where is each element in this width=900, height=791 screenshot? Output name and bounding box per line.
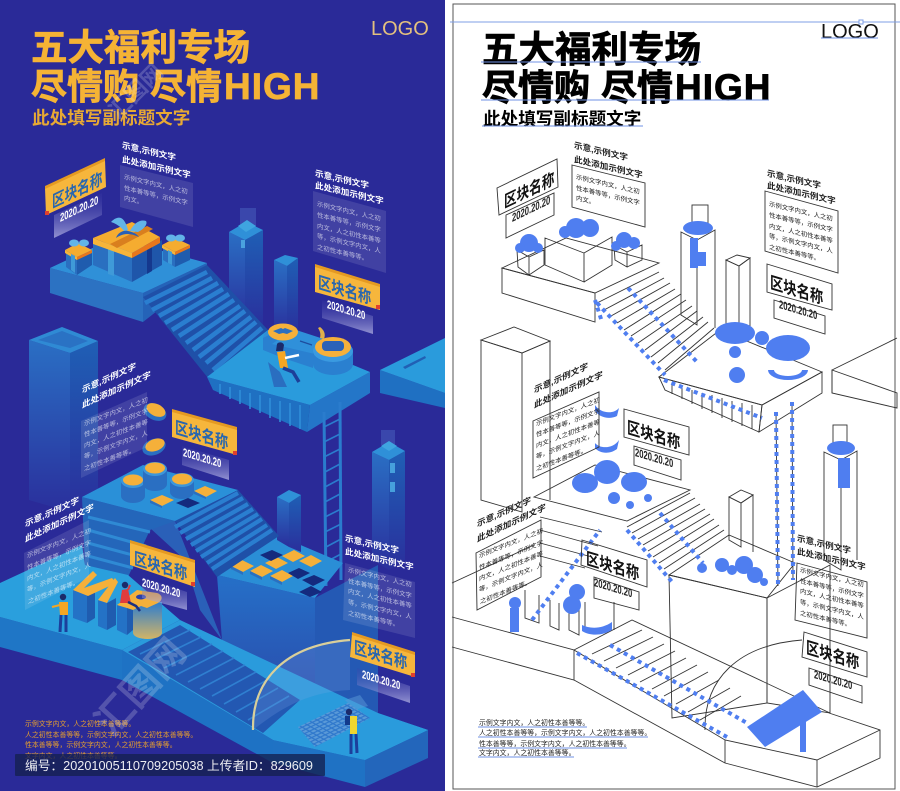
person: sitting woman: [120, 582, 140, 611]
text block A: 内文。: [124, 193, 143, 206]
footer text: 人之初性本善等等，示例文字内文，人之初性本善等等。: [25, 730, 197, 739]
text block C: 示例文字内文，人之初: [84, 395, 148, 428]
wireframe title: 此处填写副标题文字: [483, 109, 641, 129]
wire: text blocks: 等，示例文字内文，人: [769, 231, 833, 255]
wire: banners: [497, 159, 867, 703]
icon: coins: [121, 400, 217, 508]
wire: text blocks: 此处添加示例文字: [767, 179, 836, 206]
wire: text blocks: 示例文字内文，人之初: [576, 172, 640, 196]
wire: banners: 区块名称: [770, 273, 823, 308]
banner 3: 2020.20.20: [183, 447, 222, 471]
text block E: 内文，人之初性本善等: [348, 586, 412, 610]
watermark bar: 编号：20201005110709205038 上传者ID：829609: [25, 759, 313, 773]
wire: text blocks: 示例文字内文，人之初: [800, 565, 864, 589]
platform: coin platform top: [82, 465, 238, 521]
text block B: 等，示例文字内文，人: [317, 231, 381, 255]
building: top centre tower: [229, 208, 263, 328]
platform: gift base: [50, 238, 207, 322]
icon: VIP letters: [73, 571, 162, 639]
text block D: 等，示例文字内文，人: [27, 560, 91, 594]
wire: text blocks: 示例文字内文，人之初: [479, 526, 543, 560]
text block D: 示意,示例文字: [25, 494, 79, 529]
text block A: 示例文字内文，人之初: [124, 172, 188, 196]
stairs: upper staircase: [143, 265, 268, 378]
text block C: 此处添加示例文字: [82, 368, 151, 410]
wire: banners: 2020.20.20: [594, 577, 633, 601]
banner 1: 区块名称: [52, 168, 103, 212]
wire: text blocks: [476, 139, 867, 638]
wire: footer text: 示例文字内文，人之初性本善等等。: [479, 718, 589, 727]
text block B: 此处添加示例文字: [315, 179, 384, 206]
building: lower right tower: [372, 430, 405, 570]
text block D: [24, 494, 94, 610]
wireframe illustration: [452, 139, 897, 787]
text block B: 示例文字内文，人之初: [317, 199, 381, 223]
wire: platforms: [452, 238, 897, 787]
text block A: 性本善等等，示例文字: [124, 183, 188, 207]
wire: text blocks: 此处添加示例文字: [574, 153, 643, 180]
text block B: 示意,示例文字: [315, 167, 369, 191]
icon: keyboard: [298, 695, 370, 747]
footer text: [25, 719, 197, 760]
platform: tile platform: [217, 535, 378, 713]
banner 5: 区块名称: [354, 638, 407, 673]
wire: footer text: 性本善等等，示例文字内文，人之初性本善等等。: [479, 739, 631, 748]
wireframe title: HIGH: [675, 67, 772, 108]
person: figure at keyboard: [345, 709, 357, 754]
wire: text blocks: 性本善等等，示例文字: [536, 406, 600, 439]
icon: large gift box: [93, 218, 162, 282]
person: standing man: [52, 594, 68, 632]
icon: tiles: [231, 550, 325, 597]
wire: text blocks: 之初性本善等等。: [769, 242, 820, 263]
wire: text blocks: 之初性本善等等。: [800, 608, 851, 629]
wire: text blocks: 性本善等等，示例文字: [769, 210, 833, 234]
wire: text blocks: 之初性本善等等。: [480, 577, 531, 606]
wireframe title: 尽情购: [482, 67, 590, 108]
banner 2: 区块名称: [318, 273, 371, 308]
wire: banners: 2020.20.20: [512, 194, 551, 225]
text block E: 等，示例文字内文，人: [348, 597, 412, 621]
wire: staircase lines: [517, 237, 793, 720]
wireframe title: LOGO: [821, 21, 879, 43]
text block E: 示例文字内文，人之初: [348, 565, 412, 589]
text block B: 性本善等等，示例文字: [317, 210, 381, 234]
subtitle: 此处填写副标题文字: [32, 108, 190, 128]
text block E: [343, 532, 415, 638]
wire: text blocks: 示意,示例文字: [767, 167, 821, 191]
wire: text blocks: 此处添加示例文字: [477, 501, 546, 544]
text block E: 此处添加示例文字: [345, 545, 414, 572]
title: 尽情: [150, 66, 222, 107]
wire: text blocks: 此处添加示例文字: [797, 545, 866, 572]
stairs: coin platform left staircase: [82, 497, 175, 577]
wire: text blocks: 等，示例文字内文，人: [800, 597, 864, 621]
text block C: [81, 360, 151, 478]
stairs: coin platform right staircase: [150, 490, 279, 640]
wire: text blocks: 示例文字内文，人之初: [536, 395, 600, 428]
wire: banners: 区块名称: [586, 549, 639, 584]
footer text: 性本善等等，示例文字内文，人之初性本善等等。: [25, 740, 177, 749]
icon: small gift box left: [65, 240, 92, 275]
wire: footer text: [478, 718, 651, 757]
text block E: 示意,示例文字: [345, 532, 399, 556]
wireframe title: 尽情: [601, 67, 673, 108]
wire: text blocks: 内文，人之初性本善等: [800, 586, 864, 610]
title: 尽情购: [31, 66, 139, 107]
text block C: 内文，人之初性本善等: [84, 417, 148, 450]
title: [31, 27, 320, 107]
banner 2: [315, 264, 380, 334]
wire: text blocks: 内文，人之初性本善等: [536, 417, 600, 450]
wireframe title: 五大福利专场: [482, 29, 701, 70]
text block B: [313, 167, 386, 273]
banner 3: [172, 409, 237, 480]
wire: text blocks: 示意,示例文字: [797, 532, 851, 556]
icon: game console discs: [263, 324, 353, 375]
wire: text blocks: 此处添加示例文字: [534, 368, 603, 410]
platform: desk area with railing: [207, 330, 370, 432]
banner 1: [45, 158, 106, 238]
building: second pillar: [274, 255, 298, 333]
wireframe title: [481, 21, 879, 129]
text block B: 之初性本善等等。: [317, 242, 368, 263]
title: 五大福利专场: [31, 27, 250, 68]
text block A: 示意,示例文字: [122, 139, 176, 163]
text block D: 内文，人之初性本善等: [27, 549, 91, 583]
wire: banners: 2020.20.20: [635, 447, 674, 471]
banner 4: [130, 540, 195, 610]
footer text: 示例文字内文，人之初性本善等等。: [25, 719, 135, 728]
banner 5: 2020.20.20: [362, 669, 401, 693]
banner 4: 区块名称: [134, 549, 187, 584]
wire: text blocks: 性本善等等，示例文字: [479, 538, 543, 572]
wire: text blocks: 示意,示例文字: [477, 494, 531, 529]
wire: footer text: 人之初性本善等等，示例文字内文，人之初性本善等等。: [479, 728, 651, 737]
text block E: 性本善等等，示例文字: [348, 576, 412, 600]
title: HIGH: [224, 66, 320, 107]
wire: text blocks: 等，示例文字内文，人: [536, 428, 600, 461]
banner 2: 2020.20.20: [327, 299, 366, 323]
panel: wireframe poster: [450, 4, 900, 789]
banner 1: 2020.20.20: [60, 194, 99, 225]
wire: text blocks: 性本善等等，示例文字: [576, 183, 640, 207]
footer text: 文字内文，人之初性本善等等。: [25, 751, 121, 760]
icon: small gift box right: [162, 234, 190, 267]
text block A: 此处添加示例文字: [122, 153, 191, 180]
person: seated figure: [268, 342, 299, 387]
wire: text blocks: 示意,示例文字: [574, 139, 628, 163]
wire: text blocks: 示意,示例文字: [534, 360, 588, 395]
watermark marks: 汇图网: [87, 631, 195, 744]
wire: anchor points: [509, 218, 855, 752]
text block D: 之初性本善等等。: [28, 577, 79, 606]
text block C: 等，示例文字内文，人: [84, 428, 148, 461]
wire: text blocks: 性本善等等，示例文字: [800, 576, 864, 600]
logo: LOGO: [371, 18, 429, 40]
icon: ladder: [324, 402, 341, 586]
wire: footer text: 文字内文，人之初性本善等等。: [479, 748, 575, 757]
wire: banners: 区块名称: [627, 418, 680, 453]
banner 4: 2020.20.20: [142, 577, 181, 601]
wire: banners: 区块名称: [504, 168, 555, 212]
wire: banners: 区块名称: [806, 638, 859, 673]
text block C: 性本善等等，示例文字: [84, 406, 148, 439]
text block D: 此处添加示例文字: [25, 501, 94, 544]
pillar: small pillar: [277, 490, 301, 552]
text block C: 之初性本善等等。: [84, 445, 135, 473]
panel: colour poster: [0, 0, 445, 791]
banner 3: 区块名称: [175, 418, 228, 453]
platform: VIP floor and ramp: [0, 545, 428, 763]
wire: text blocks: 内文。: [576, 193, 595, 206]
building: large left tower: [29, 327, 98, 512]
watermark marks: [87, 59, 195, 744]
text block D: 性本善等等，示例文字: [27, 538, 91, 572]
wire: text blocks: 示例文字内文，人之初: [769, 199, 833, 223]
wire: banners: 2020.20.20: [814, 669, 853, 693]
wire: buildings: [481, 205, 857, 570]
banner 5: [350, 632, 415, 703]
wire: text blocks: 内文，人之初性本善等: [769, 221, 833, 245]
text block B: 内文，人之初性本善等: [317, 221, 381, 245]
icon: glass arch: [253, 640, 350, 730]
block: right edge platform: [380, 338, 445, 408]
text block C: 示意,示例文字: [82, 360, 136, 395]
text block E: 之初性本善等等。: [348, 608, 399, 629]
wire: text blocks: 之初性本善等等。: [536, 445, 587, 473]
wire: banners: 2020.20.20: [779, 299, 818, 323]
text block D: 示例文字内文，人之初: [27, 526, 91, 560]
watermark bar: [15, 754, 325, 776]
platform: bottom keyboard platform: [273, 700, 428, 787]
wire: text blocks: 内文，人之初性本善等: [479, 549, 543, 583]
wire: text blocks: 等，示例文字内文，人: [479, 560, 543, 594]
watermark marks: 汇图网: [104, 59, 168, 124]
text block A: [120, 139, 193, 227]
